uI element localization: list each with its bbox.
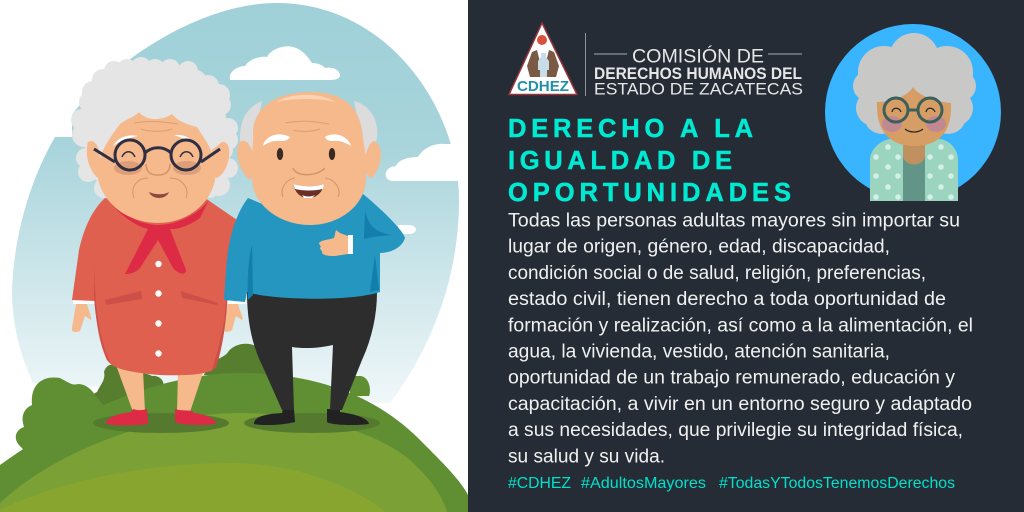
woman legs: [116, 365, 204, 412]
avatar neck: [903, 135, 925, 164]
avatar cheeks: [882, 116, 902, 132]
man forehead wrinkles: [285, 121, 329, 131]
organisation name: [594, 44, 803, 98]
logo CDHEZ text: CDHEZ: [517, 78, 569, 95]
avatar jacket: [870, 139, 958, 201]
woman ears: [87, 141, 229, 178]
man shoes: [254, 409, 369, 425]
avatar mouth: [905, 129, 923, 132]
woman shoes: [106, 409, 216, 425]
avatar glasses: [884, 98, 942, 122]
body text: condición social o de salud, religión, preferencias,: [508, 263, 926, 284]
man figure: [224, 92, 405, 425]
logo divider: [585, 33, 586, 96]
body text: su salud y su vida.: [508, 446, 665, 467]
dress fold left and right: [94, 262, 227, 370]
avatar jacket dots: [873, 144, 954, 200]
body text: Todas las personas adultas mayores sin importar su: [508, 210, 960, 232]
triangle: [509, 23, 577, 94]
hashtags: #CDHEZ: [508, 475, 571, 492]
man forehead highlight: [277, 95, 335, 102]
body text: agua, la vivienda, vestido, atención sanitaria,: [508, 342, 890, 362]
logo: CDHEZ triangle: [509, 23, 577, 95]
bush: small right: [350, 376, 370, 396]
avatar blouse: [903, 157, 925, 201]
shadow: man: [244, 413, 380, 433]
woman nose: [146, 164, 170, 175]
man eyes: [277, 148, 283, 160]
body text: lugar de origen, género, edad, discapacidad,: [508, 237, 890, 258]
hashtags: #AdultosMayores: [581, 475, 706, 492]
body text: capacitación, a vivir en un entorno seguro y adaptado: [508, 394, 972, 415]
name line 1: COMISIÓN DE: [632, 44, 764, 68]
woman mouth: [149, 192, 169, 198]
dress buttons: [155, 261, 162, 357]
logo hands: [527, 50, 559, 77]
woman eyebrows: [113, 135, 197, 146]
cloud: top: [230, 46, 340, 80]
shadow: woman: [93, 413, 229, 433]
woman forehead wrinkles: [134, 121, 178, 131]
sweater folds: [248, 211, 392, 300]
name line 2: DERECHOS HUMANOS DEL: [594, 64, 802, 83]
man cuff: [348, 235, 353, 254]
name line 3: ESTADO DE ZACATECAS: [594, 80, 803, 98]
title line 3: OPORTUNIDADES: [508, 179, 791, 207]
name line rules: [594, 54, 802, 55]
avatar: grandmother in blue circle: [825, 24, 1001, 201]
title line 1: DERECHO A LA: [508, 115, 753, 143]
body text: estado civil, tienen derecho a toda oportunidad de: [508, 289, 946, 310]
bush: dark back left: [82, 365, 163, 420]
bush: dark back centre: [204, 344, 272, 376]
woman hands: [72, 304, 243, 332]
cloud: right: [386, 144, 460, 181]
man head: [251, 92, 367, 225]
man eyebrows: [263, 134, 351, 146]
woman glasses: [94, 140, 220, 170]
body text: oportunidad de un trabajo remunerado, educación y: [508, 368, 956, 389]
red scarf: [107, 199, 209, 274]
man teeth: [293, 184, 324, 198]
avatar clipped jacket: [870, 139, 958, 201]
avatar hair: [853, 33, 976, 134]
panel: dark content background: [468, 0, 1024, 512]
hair back: [71, 57, 238, 198]
title line 2: IGUALDAD DE: [508, 147, 732, 175]
avatar background: [825, 24, 1001, 200]
man nose: [293, 168, 325, 175]
woman sleeve cuffs: [73, 300, 246, 304]
man hair: [240, 101, 377, 167]
cloud: small: [398, 225, 416, 234]
man trousers: [247, 292, 377, 410]
body text: formación y realización, así como a la alimentación, el: [508, 315, 973, 336]
woman face: [97, 112, 216, 223]
avatar eyes: [892, 108, 935, 112]
bush: left: [16, 377, 130, 460]
hill: middle: [0, 413, 447, 512]
hashtags: [508, 475, 955, 492]
man ears: [237, 141, 381, 180]
body text: [508, 210, 973, 467]
woman cheeks: [114, 161, 142, 175]
woman smile wrinkles: [133, 178, 187, 198]
hill: back: [0, 373, 468, 512]
hill: front: [0, 463, 385, 512]
dress pockets: [105, 291, 218, 305]
man mouth: [293, 184, 324, 198]
man hand: [319, 230, 348, 256]
avatar face: [877, 87, 951, 146]
logo person: [538, 53, 549, 77]
woman figure: [71, 57, 246, 425]
panel: illustration of older couple: [0, 3, 468, 512]
logo sun: [537, 35, 547, 45]
woman dress: [72, 198, 240, 375]
man smile wrinkles: [282, 178, 339, 197]
title: [508, 115, 791, 207]
hashtags: #TodasYTodosTenemosDerechos: [719, 475, 955, 492]
man sleeve and sweater: [224, 194, 405, 302]
sky background shape: [12, 3, 459, 403]
body text: a sus necesidades, que privilegie su integridad física,: [508, 420, 963, 441]
